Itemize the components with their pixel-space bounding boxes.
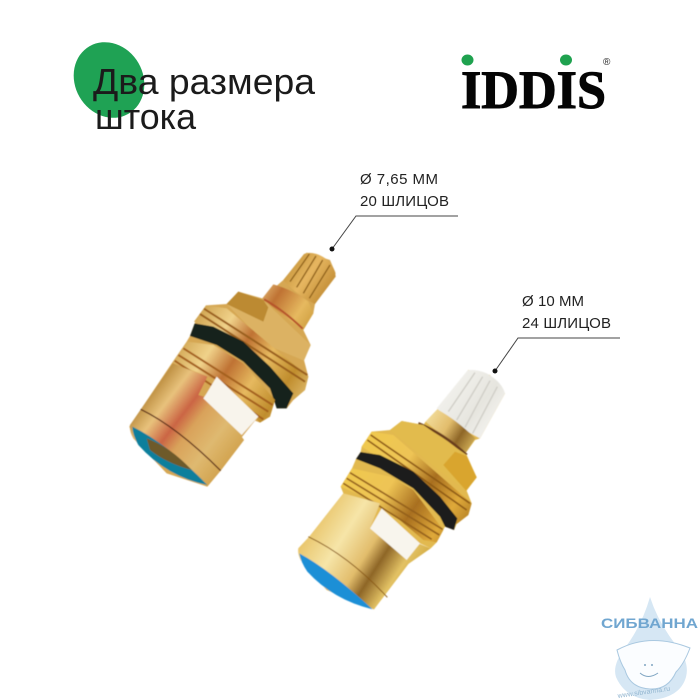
logo: IDDIS: ® <box>603 57 611 68</box>
title: Два размера <box>93 61 316 102</box>
watermark: Sibvanna: www.sibvanna.ru <box>616 686 671 700</box>
splined stem <box>283 253 336 304</box>
O-ring <box>190 323 293 408</box>
upper flange <box>362 432 472 524</box>
title: штока <box>95 96 197 137</box>
white splined stem <box>437 370 505 438</box>
O-ring <box>356 452 457 530</box>
upper flange <box>194 305 308 400</box>
callout: 7,65 mm: 20 ШЛИЦОВ <box>360 193 449 210</box>
blue seat <box>132 427 207 485</box>
body <box>298 493 431 609</box>
title <box>93 61 316 137</box>
neck <box>426 409 475 454</box>
hex nut <box>227 292 311 361</box>
silhouette <box>298 370 505 609</box>
callout: 10 mm <box>492 293 620 374</box>
callout: 7,65 mm: Ø 7,65 ММ <box>360 171 438 188</box>
watermark: Sibvanna <box>601 597 698 700</box>
logo: IDDIS: IDDIS <box>461 60 606 120</box>
hex nut <box>390 421 477 491</box>
white window <box>370 508 420 560</box>
brass cartridge with 20-spline stem <box>129 253 336 487</box>
blue seat <box>299 553 373 609</box>
lower thread <box>341 468 443 542</box>
white window <box>203 377 258 435</box>
groove <box>308 537 387 597</box>
body <box>130 363 255 487</box>
callout: 10 mm: 24 ШЛИЦОВ <box>522 315 611 332</box>
groove <box>141 409 221 471</box>
callout: 10 mm: Ø 10 ММ <box>522 293 584 310</box>
brass cartridge with 24-spline white stem <box>298 370 505 609</box>
lower thread <box>172 342 275 423</box>
green blob <box>60 29 158 131</box>
callout: 7,65 mm <box>330 171 458 252</box>
silhouette <box>129 253 336 487</box>
neck <box>262 284 313 330</box>
watermark: Sibvanna: СИБВАННА <box>601 616 698 631</box>
